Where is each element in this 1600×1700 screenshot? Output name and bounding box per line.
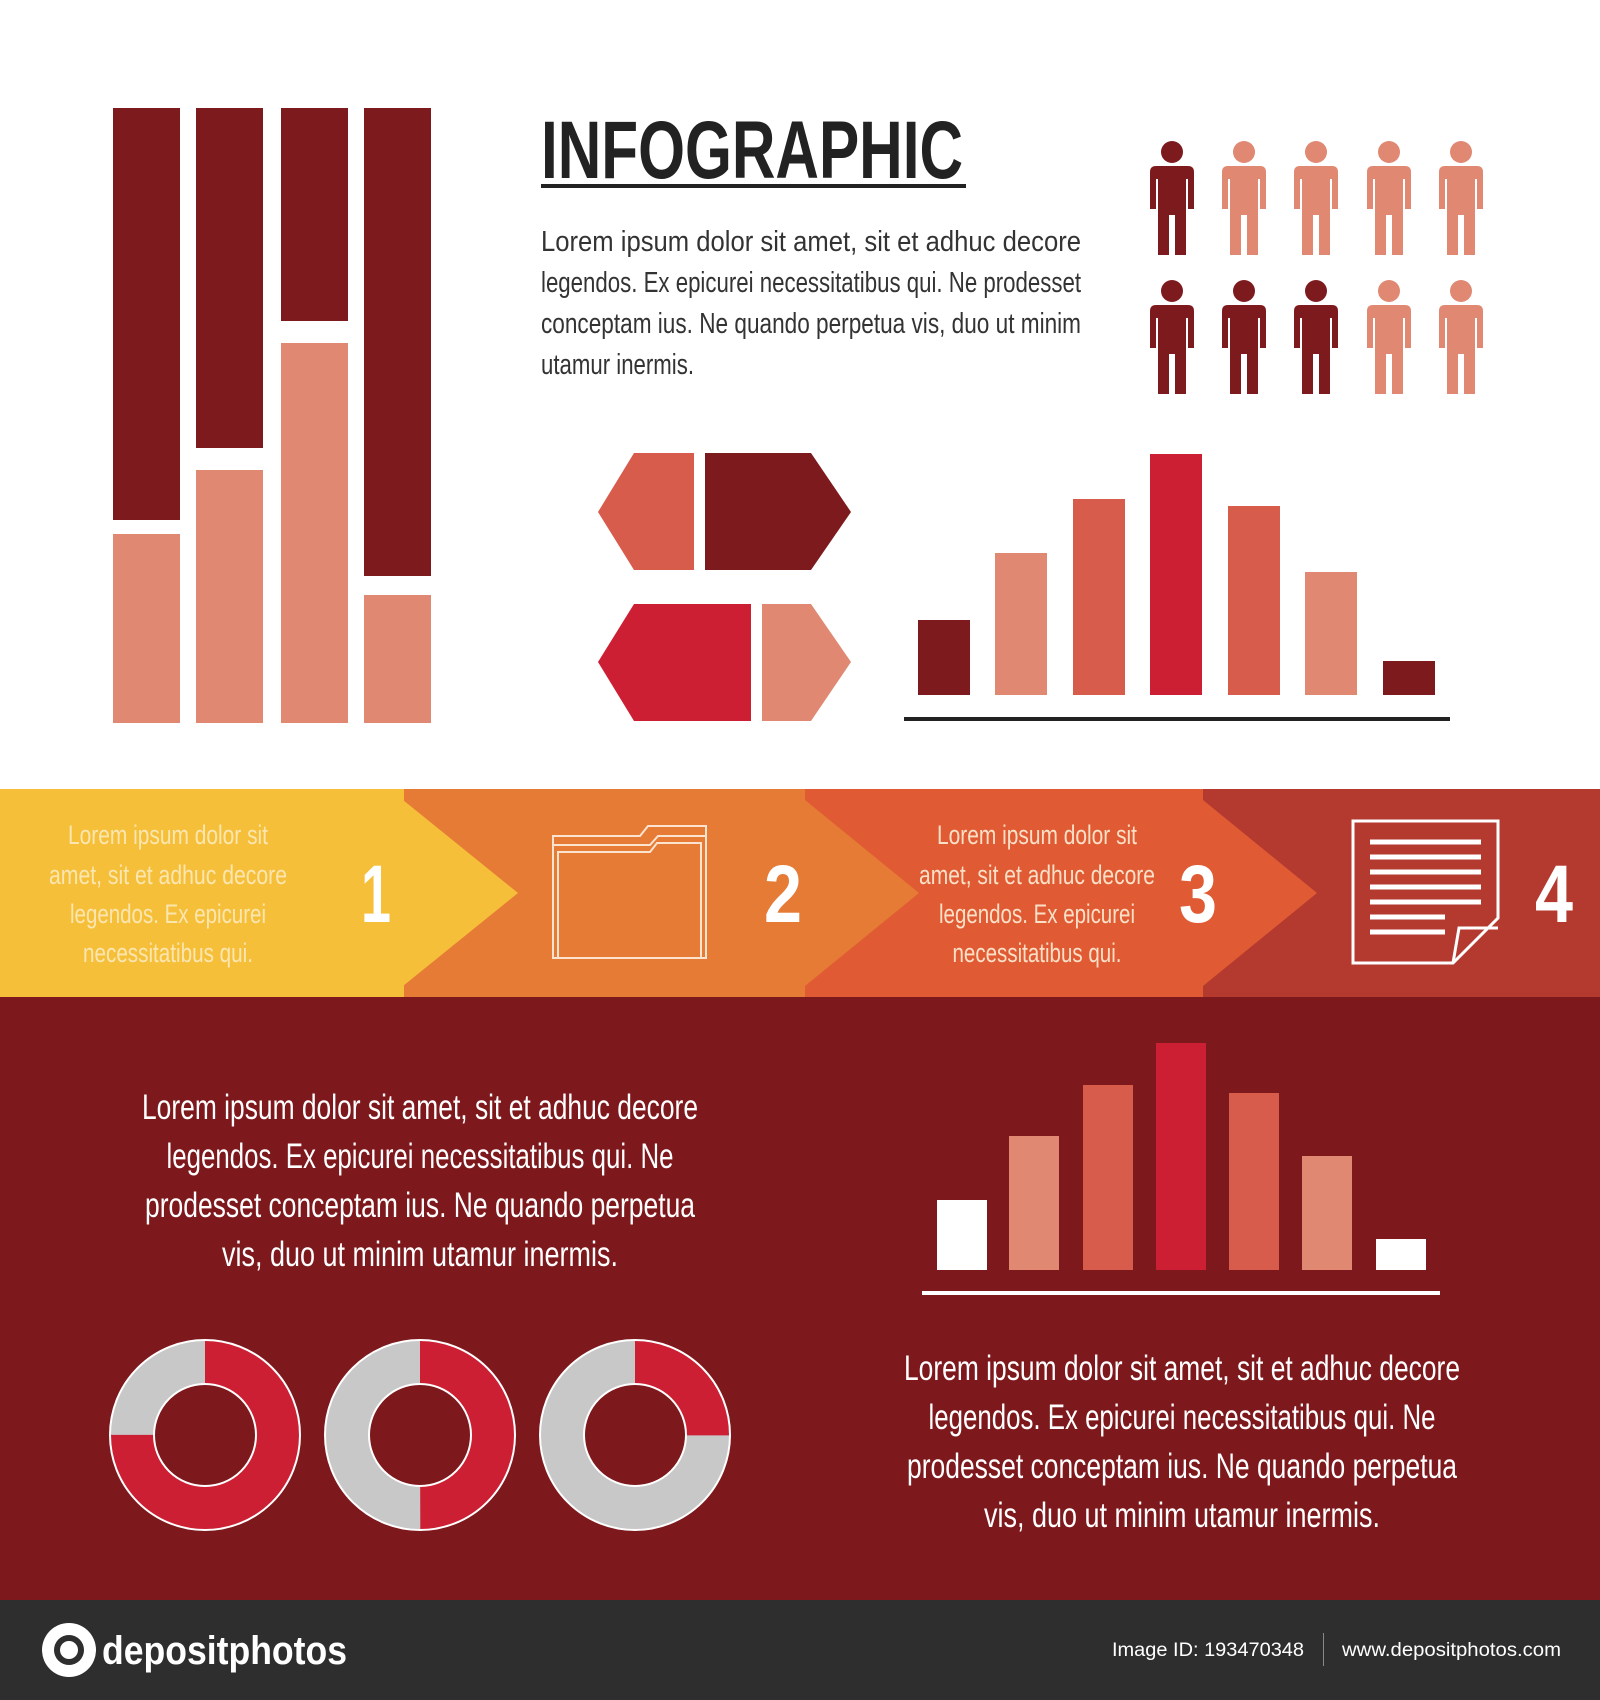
intro paragraph: legendos. Ex epicurei necessitatibus qui. Ne prodesset: [541, 267, 1081, 299]
step 3 text: necessitatibus qui.: [952, 938, 1122, 968]
step 3 text: Lorem ipsum dolor sit: [937, 820, 1137, 850]
footer: [0, 1600, 1600, 1700]
bottom left text: vis, duo ut minim utamur inermis.: [222, 1235, 618, 1274]
intro paragraph: [541, 226, 1081, 381]
bottom left text: prodesset conceptam ius. Ne quando perpetua: [145, 1186, 695, 1225]
intro paragraph: conceptam ius. Ne quando perpetua vis, duo ut minim: [541, 308, 1081, 340]
step 3 text: legendos. Ex epicurei: [939, 899, 1135, 929]
stacked bar chart: [113, 108, 431, 723]
title: INFOGRAPHIC: [541, 105, 963, 196]
bottom left text: legendos. Ex epicurei necessitatibus qui. Ne: [166, 1137, 674, 1176]
step numbers: 1: [361, 849, 391, 940]
icon: logo camera: [42, 1623, 96, 1677]
bottom panel: [0, 997, 1600, 1600]
step numbers: 2: [764, 849, 802, 940]
icon: document: [1353, 821, 1498, 963]
bottom left text: Lorem ipsum dolor sit amet, sit et adhuc decore: [142, 1088, 698, 1127]
step numbers: 4: [1535, 849, 1573, 940]
step 3 text: [919, 820, 1155, 968]
icon: folder: [553, 826, 706, 958]
intro paragraph: utamur inermis.: [541, 349, 694, 381]
bottom right text: vis, duo ut minim utamur inermis.: [984, 1496, 1380, 1535]
bottom right text: [904, 1349, 1460, 1535]
bottom right text: legendos. Ex epicurei necessitatibus qui. Ne: [928, 1398, 1436, 1437]
intro paragraph: Lorem ipsum dolor sit amet, sit et adhuc decore: [541, 226, 1081, 258]
top bar chart: [904, 454, 1450, 721]
people pictogram: [1150, 141, 1483, 394]
step 1 text: necessitatibus qui.: [83, 938, 253, 968]
footer: depositphotos: [102, 1629, 347, 1673]
arrow shapes: [598, 453, 851, 721]
step 1 text: Lorem ipsum dolor sit: [68, 820, 268, 850]
step numbers: 3: [1179, 849, 1217, 940]
step 1 text: legendos. Ex epicurei: [70, 899, 266, 929]
donut charts: [110, 1340, 730, 1530]
bottom left text: [142, 1088, 698, 1274]
footer: www.depositphotos.com: [1341, 1640, 1561, 1661]
footer: Image ID: 193470348: [1112, 1640, 1304, 1661]
bottom bar chart: [922, 1043, 1440, 1295]
step 1 text: amet, sit et adhuc decore: [49, 860, 287, 890]
step 3 text: amet, sit et adhuc decore: [919, 860, 1155, 890]
step numbers: [361, 849, 1573, 940]
steps band: [0, 789, 1600, 997]
step 1 text: [49, 820, 287, 968]
